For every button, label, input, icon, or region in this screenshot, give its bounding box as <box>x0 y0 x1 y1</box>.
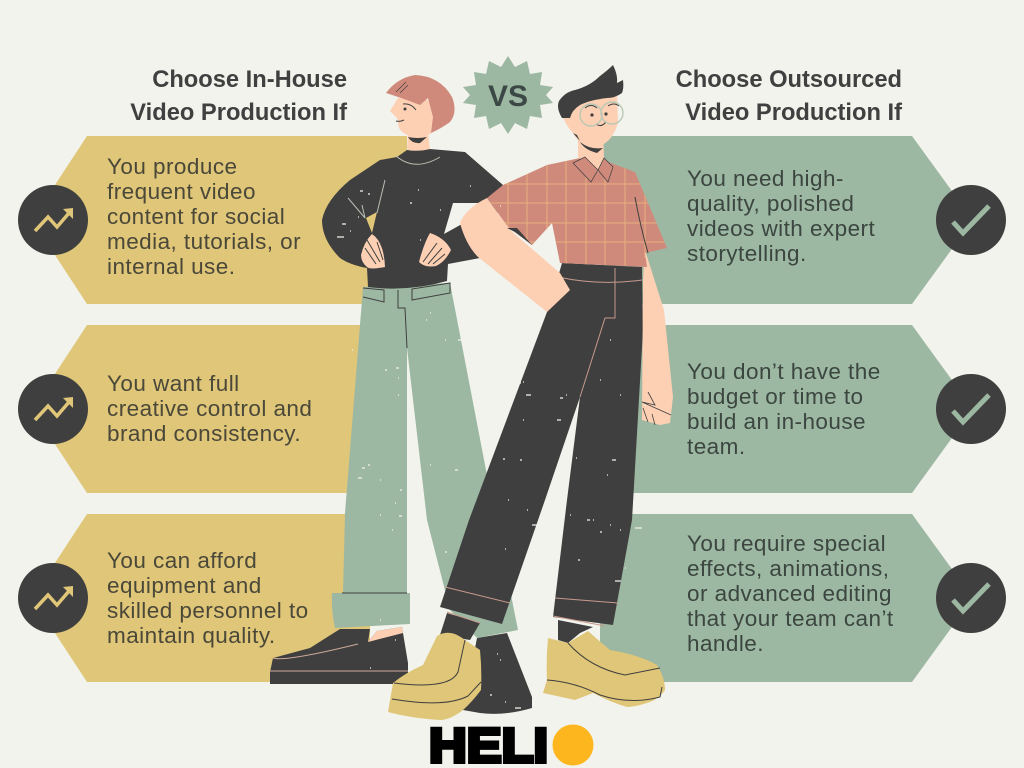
sweater <box>322 149 503 289</box>
text: outsourced reason 3: You require special <box>687 531 886 556</box>
gap between arm and torso <box>366 212 377 233</box>
text: in-house reason 2: creative control and <box>107 396 312 421</box>
icon: check mark 1 <box>936 185 1006 255</box>
text: outsourced reason 3: handle. <box>687 631 764 656</box>
panel: in-house reason 3 <box>32 514 370 682</box>
face <box>390 98 440 136</box>
panel: outsourced reason 2 <box>603 325 973 493</box>
yellow shoes <box>388 633 481 720</box>
text: in-house reason 1: content for social <box>107 204 285 229</box>
paint speckles <box>337 186 646 708</box>
text: in-house reason 2: brand consistency. <box>107 421 301 446</box>
logo: Helio <box>429 720 594 768</box>
illustration: woman in sweater and green trousers <box>270 75 532 714</box>
text: in-house reason 3: You can afford <box>107 548 257 573</box>
heading: in-house: Choose In-House <box>152 67 347 93</box>
text: in-house reason 1: You produce <box>107 154 237 179</box>
panel: outsourced reason 3 <box>600 514 973 682</box>
near shoe <box>270 627 408 684</box>
text: outsourced reason 1: storytelling. <box>687 241 807 266</box>
bent arm <box>460 198 570 312</box>
neck <box>578 130 604 172</box>
hair <box>386 75 455 133</box>
text: in-house reason 1: internal use. <box>107 254 235 279</box>
icon: trend arrow 1 <box>18 185 88 255</box>
text: in-house reason 3: skilled personnel to <box>107 598 309 623</box>
panel: outsourced reason 1 <box>603 136 973 304</box>
text: outsourced reason 3: effects, animations, <box>687 556 889 581</box>
glasses <box>580 104 602 126</box>
text: outsourced reason 1: You need high- <box>687 166 844 191</box>
vs badge <box>463 56 553 134</box>
text: in-house reason 2: You want full <box>107 371 240 396</box>
vs badge: VS <box>488 80 528 113</box>
icon: trend arrow 2 <box>18 374 88 444</box>
shirt collar <box>573 157 613 182</box>
icon: check mark 2 <box>936 374 1006 444</box>
text: outsourced reason 2: You don’t have the <box>687 359 881 384</box>
panel: in-house reason 1 <box>32 136 407 304</box>
text: outsourced reason 3: or advanced editing <box>687 581 892 606</box>
hair <box>558 65 623 118</box>
far shoe <box>463 633 532 714</box>
socks <box>440 613 480 640</box>
hands <box>361 234 385 268</box>
icon: check mark 3 <box>936 563 1006 633</box>
panel: in-house reason 2 <box>32 325 370 493</box>
heading: outsourced: Choose Outsourced <box>676 67 902 93</box>
text: in-house reason 3: equipment and <box>107 573 262 598</box>
text: outsourced reason 2: build an in-house <box>687 409 866 434</box>
face <box>563 93 618 147</box>
text: outsourced reason 1: quality, polished <box>687 191 854 216</box>
heading: outsourced: Video Production If <box>685 100 902 126</box>
heading: in-house: Video Production If <box>130 100 347 126</box>
dark trousers <box>440 263 643 625</box>
green trousers <box>343 283 518 638</box>
neck <box>407 130 430 152</box>
icon: trend arrow 3 <box>18 563 88 633</box>
plaid shirt <box>487 157 667 267</box>
text: outsourced reason 2: team. <box>687 434 746 459</box>
right arm <box>642 250 673 425</box>
trouser cuff <box>332 593 410 628</box>
text: in-house reason 1: media, tutorials, or <box>107 229 301 254</box>
text: outsourced reason 2: budget or time to <box>687 384 864 409</box>
illustration: man in plaid shirt and dark trousers <box>388 65 673 720</box>
text: in-house reason 3: maintain quality. <box>107 623 276 648</box>
text: in-house reason 1: frequent video <box>107 179 256 204</box>
text: outsourced reason 3: that your team can’t <box>687 606 894 631</box>
text: outsourced reason 1: videos with expert <box>687 216 875 241</box>
